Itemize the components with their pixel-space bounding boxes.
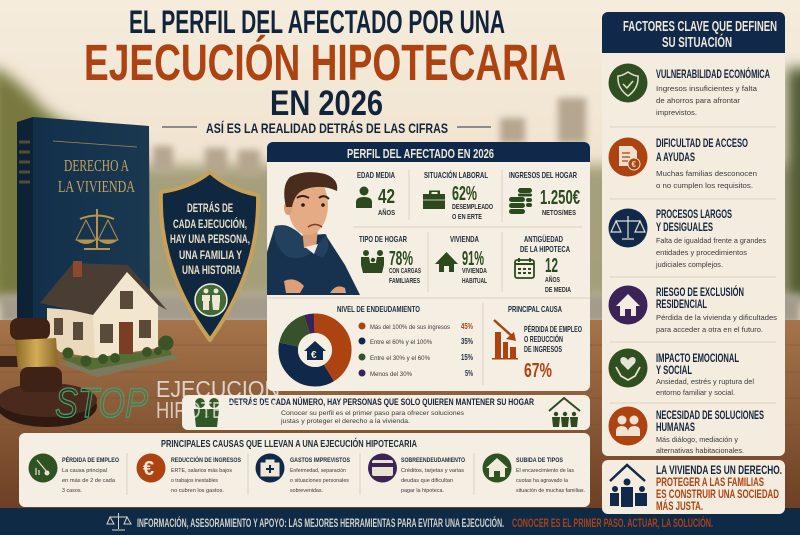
factor: riesgo de exclusión: para acceder a otra en el futuro. [656, 325, 763, 334]
cause: gastos imprevistos [256, 454, 350, 494]
factor: dificultad de acceso [608, 138, 757, 190]
cause: pérdida de empleo: 3 casos. [62, 488, 82, 494]
factor: impacto emocional: IMPACTO EMOCIONAL [656, 353, 739, 365]
factor: impacto emocional [608, 348, 754, 397]
cause: reducción de ingresos: ERTE, salarios más bajos [171, 468, 232, 474]
cause: gastos imprevistos: o situaciones personales [290, 478, 349, 484]
shield callout: HAY UNA PERSONA, [170, 232, 250, 246]
cause: reducción de ingresos: no cubren los gastos. [171, 488, 224, 494]
icon: roof and family [610, 465, 647, 507]
stat: situación laboral: O EN ERTE [452, 212, 482, 221]
cause: gastos imprevistos: Enfermedad, separación [290, 468, 346, 474]
book: derecho a la vivienda: LA VIVIENDA [58, 177, 136, 196]
legend: Entre el 60% y el 100% [370, 339, 432, 346]
factor: riesgo de exclusión: RESIDENCIAL [656, 299, 707, 311]
factor: procesos largos: Falta de igualdad frente a grandes [656, 236, 766, 245]
factor: necesidad de soluciones: alternativas habitacionales. [656, 446, 744, 455]
shield callout [161, 172, 258, 340]
cause: pérdida de empleo: PÉRDIDA DE EMPLEO [62, 455, 119, 464]
factor: procesos largos: Y DESIGUALES [656, 222, 713, 234]
illustration: worried man [267, 172, 360, 295]
cause: pérdida de empleo: La causa principal [62, 468, 107, 474]
cause: sobreendeudamiento: pagar la hipoteca. [401, 488, 444, 494]
principal causa: DE INGRESOS [524, 344, 562, 354]
factor: necesidad de soluciones: Más diálogo, mediación y [656, 435, 738, 444]
principal causa: PRINCIPAL CAUSA [508, 304, 562, 314]
stat: ingresos del hogar: 1.250€ [540, 187, 580, 209]
factor: dificultad de acceso: DIFICULTAD DE ACCESO [656, 138, 748, 150]
factor: dificultad de acceso: Muchas familias desconocen [656, 169, 757, 178]
legend: 5% [465, 369, 473, 378]
banner: detrás de cada número: justas y proteger el derecho a la vivienda. [280, 418, 410, 425]
factor: procesos largos: judiciales complejos. [655, 260, 723, 269]
stat: situación laboral [423, 169, 493, 221]
shield callout: DETRÁS DE [187, 200, 233, 215]
subtitle: ASÍ ES LA REALIDAD DETRÁS DE LAS CIFRAS [206, 120, 448, 136]
stat: tipo de hogar: TIPO DE HOGAR [359, 234, 407, 244]
factor: riesgo de exclusión: Pérdida de la vivienda y dificultades [656, 313, 777, 322]
stat: vivienda: 91% [462, 248, 484, 270]
stat: tipo de hogar: CON CARGAS [389, 266, 421, 275]
factor: vulnerabilidad económica [608, 64, 770, 117]
legend [358, 322, 473, 378]
stat: edad media: 42 [378, 186, 395, 208]
factor: impacto emocional: entorno familiar y social. [656, 388, 735, 397]
banner: detrás de cada número: DETRÁS DE CADA NÚMERO, HAY PERSONAS QUE SOLO QUIEREN MANTENER SU HOGAR [229, 396, 534, 407]
cause: pérdida de empleo: en más de 2 de cada [62, 478, 115, 484]
cause: sobreendeudamiento: SOBREENDEUDAMIENTO [401, 457, 465, 464]
factores header: SU SITUACIÓN [662, 33, 732, 51]
legend: Entre el 30% y el 60% [370, 355, 430, 362]
factor: impacto emocional: Y SOCIAL [656, 365, 692, 377]
stat: edad media: AÑOS [378, 208, 395, 217]
principal causa: O REDUCCIÓN [524, 333, 563, 344]
factor: vulnerabilidad económica: Ingresos insuficientes y falta [656, 84, 758, 93]
footer bar: INFORMACIÓN, ASESORAMIENTO Y APOYO: LAS MEJORES HERRAMIENTAS PARA EVITAR UNA EJECUCIÓN. [137, 517, 504, 530]
stat: edad media [356, 170, 395, 217]
cause: sobreendeudamiento [368, 454, 465, 494]
stat: edad media: EDAD MEDIA [357, 170, 395, 180]
factor: necesidad de soluciones [608, 406, 764, 455]
watermark: stop ejecución hipotecaria: HIPOTECARIA [156, 397, 281, 423]
stat: vivienda: VIVIENDA [450, 234, 479, 244]
cause: gastos imprevistos: sobrevenidas. [290, 488, 323, 494]
icon: house with euro: € [311, 350, 317, 361]
factor: riesgo de exclusión: RIESGO DE EXCLUSIÓN [656, 286, 744, 299]
cause: reducción de ingresos [136, 454, 241, 494]
title: EL PERFIL DEL AFECTADO POR UNA [129, 4, 505, 40]
cause: gastos imprevistos: GASTOS IMPREVISTOS [290, 457, 350, 464]
callout: la vivienda es un derecho [602, 460, 785, 514]
factor: procesos largos: entidades y procedimientos [656, 248, 747, 257]
factor: dificultad de acceso: A AYUDAS [656, 152, 695, 164]
stat: tipo de hogar: 78% [389, 248, 413, 270]
principal causa: PÉRDIDA DE EMPLEO [524, 324, 582, 334]
stat: antigüedad de la hipoteca: AÑOS [545, 275, 560, 284]
stat: situación laboral: 62% [452, 183, 477, 205]
panel: factores clave [602, 12, 785, 456]
title: EN 2026 [270, 84, 383, 123]
banner: detrás de cada número [182, 395, 590, 430]
panel header [267, 142, 590, 162]
legend: 35% [461, 337, 473, 346]
title: EJECUCIÓN HIPOTECARIA [84, 34, 566, 91]
factor: riesgo de exclusión [608, 286, 777, 334]
banner: detrás de cada número: Conocer su perfil es el primer paso para ofrecer soluciones [281, 410, 465, 417]
cause: subida de tipos: El encarecimiento de las [516, 468, 574, 474]
icon: falling bars [492, 320, 518, 360]
panel header: PERFIL DEL AFECTADO EN 2026 [347, 146, 494, 161]
gavel [0, 318, 97, 427]
panel: principales causas [19, 433, 590, 507]
factor: procesos largos [608, 208, 766, 269]
stat: antigüedad de la hipoteca: ANTIGÜEDAD [524, 234, 563, 244]
legend: Menos del 30% [370, 371, 412, 378]
legend: Más del 100% de sus ingresos [370, 324, 451, 331]
callout: la vivienda es un derecho: MÁS JUSTA. [656, 500, 703, 513]
stat: tipo de hogar [359, 234, 421, 285]
panel: perfil del afectado [267, 142, 590, 391]
principal causa: 67% [524, 360, 552, 382]
watermark: stop ejecución hipotecaria: EJECUCION [156, 376, 280, 402]
chart: nivel de endeudamiento: NIVEL DE ENDEUDAMIENTO [337, 304, 420, 314]
watermark: stop ejecución hipotecaria [55, 376, 281, 426]
factor: vulnerabilidad económica: de ahorros para afrontar [656, 96, 741, 105]
icon: family in circle [195, 284, 227, 316]
panel: principales causas: PRINCIPALES CAUSAS QUE LLEVAN A UNA EJECUCIÓN HIPOTECARIA [161, 437, 417, 450]
stat: ingresos del hogar: INGRESOS DEL HOGAR [509, 170, 577, 180]
icon: house with euro [298, 333, 332, 367]
stat: vivienda: VIVIENDA [462, 266, 487, 275]
title [84, 4, 566, 123]
factor: necesidad de soluciones: HUMANAS [656, 422, 695, 434]
cause: sobreendeudamiento: deudas que dificultan [401, 478, 453, 484]
legend: 45% [461, 322, 473, 331]
cause: subida de tipos: situación de muchas familias. [516, 488, 585, 494]
stat: vivienda: HABITUAL [462, 276, 487, 285]
icon: roof with people [549, 398, 580, 427]
stat: vivienda [435, 234, 487, 285]
stat: tipo de hogar: FAMILIARES [389, 276, 420, 285]
stat: antigüedad de la hipoteca: DE MEDIA [545, 285, 571, 294]
stat: ingresos del hogar [509, 170, 580, 217]
book: derecho a la vivienda: DERECHO A [64, 156, 129, 175]
factores header [602, 12, 785, 53]
factor: impacto emocional: Ansiedad, estrés y ruptura del [656, 377, 754, 386]
principal causa [492, 304, 582, 382]
cause: subida de tipos: cuotas ha agravado la [516, 478, 568, 484]
stat: antigüedad de la hipoteca: 12 [545, 255, 558, 277]
icon: family [194, 398, 219, 427]
stat: situación laboral: SITUACIÓN LABORAL [424, 169, 488, 180]
stat: antigüedad de la hipoteca: DE LA HIPOTECA [520, 244, 570, 254]
cause: reducción de ingresos: € [143, 458, 154, 480]
legend: 15% [461, 353, 473, 362]
cause: reducción de ingresos: o trabajos inestables [171, 478, 218, 484]
stat: situación laboral: DESEMPLEADO [452, 202, 493, 211]
stat: antigüedad de la hipoteca [515, 234, 571, 294]
book: derecho a la vivienda [17, 117, 150, 322]
watermark: stop ejecución hipotecaria: STOP [55, 379, 148, 426]
icon: footer scales [107, 513, 131, 530]
factor: procesos largos: PROCESOS LARGOS [656, 209, 732, 221]
cause: sobreendeudamiento: Créditos, tarjetas y varias [401, 468, 464, 474]
factor: vulnerabilidad económica: imprevistos. [656, 108, 697, 117]
house model [40, 261, 180, 377]
chart: nivel de endeudamiento [288, 304, 473, 378]
icon: gold scales [76, 209, 118, 249]
cause: subida de tipos: SUBIDA DE TIPOS [516, 457, 563, 464]
shield callout: UNA FAMILIA Y [179, 248, 242, 262]
shield callout: UNA HISTORIA [182, 263, 241, 277]
cause: subida de tipos [482, 454, 585, 494]
factor: dificultad de acceso: o no cumplen los requisitos. [656, 181, 753, 190]
cause: pérdida de empleo [28, 454, 119, 494]
shield callout: CADA EJECUCIÓN, [173, 216, 247, 231]
footer bar [0, 508, 800, 535]
stat: ingresos del hogar: NETOS/MES [542, 208, 576, 217]
cause: reducción de ingresos: REDUCCIÓN DE INGRESOS [171, 455, 241, 464]
donut chart [288, 323, 342, 377]
factor: dificultad de acceso: € [632, 160, 636, 169]
